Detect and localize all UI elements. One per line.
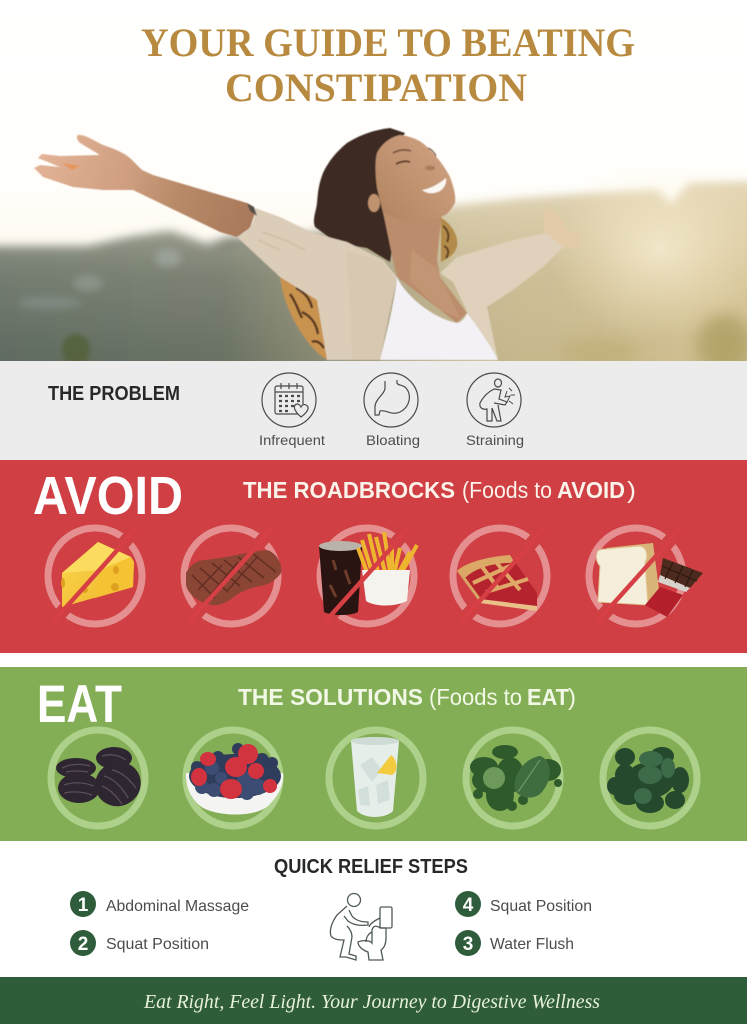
cardigan, right sleeve: [440, 233, 563, 360]
step 4: 4: [463, 895, 474, 916]
white top: [380, 277, 498, 360]
step 2: Squat Position: [106, 936, 209, 953]
step 4: [455, 891, 592, 917]
step 3: [455, 930, 574, 956]
step 1: 1: [78, 895, 89, 916]
right hand: [544, 210, 578, 248]
food: bread and chocolate, crossed out: [589, 527, 703, 624]
step 4: Squat Position: [490, 898, 592, 915]
hair, dark mass: [314, 128, 405, 262]
food: steak, crossed out: [184, 527, 281, 624]
brows, eyes, nose shadow: [393, 150, 411, 153]
heading: the solutions: EAT: [527, 684, 569, 710]
heading: the roadbrocks: THE ROADBROCKS: [243, 477, 455, 503]
icon: person on toilet: [330, 894, 392, 960]
food: cola and fries, crossed out: [319, 527, 417, 624]
hills background: [0, 176, 747, 361]
ear: [368, 194, 380, 212]
step 1: [70, 891, 249, 917]
panel: quick relief steps: [0, 841, 747, 977]
cardigan, left sleeve and front: [237, 208, 397, 360]
heading: quick relief steps: QUICK RELIEF STEPS: [274, 856, 468, 878]
food: bowl of berries: [186, 730, 283, 826]
golden curls, lower left: [280, 277, 328, 360]
title: YOUR GUIDE TO BEATING: [141, 20, 635, 65]
icon: stomach: [364, 373, 418, 427]
heading: the solutions: (Foods to: [429, 684, 522, 710]
hero photo: woman with open arms at sunrise: [0, 127, 747, 361]
title: CONSTIPATION: [225, 65, 527, 110]
heading: the solutions: THE SOLUTIONS: [238, 684, 423, 710]
heading: the solutions: ): [568, 684, 576, 710]
food: cheese, crossed out: [48, 527, 142, 624]
face: [376, 135, 455, 222]
label: straining: Straining: [466, 432, 524, 448]
panel: avoid: [0, 460, 747, 653]
neck and chest skin: [383, 212, 467, 323]
heading: eat: EAT: [37, 675, 122, 734]
footer banner: Eat Right, Feel Light. Your Journey to Digestive Wellness: [143, 991, 600, 1013]
title: [141, 20, 635, 110]
heading: avoid: AVOID: [33, 466, 183, 526]
heading: the roadbrocks: AVOID: [557, 477, 625, 503]
heading: the solutions: [238, 684, 576, 710]
step 3: 3: [463, 934, 473, 955]
icon: calendar with heart: [262, 373, 316, 427]
panel: the problem: [0, 361, 747, 461]
food: glass of water with lemon: [329, 730, 423, 826]
step 1: Abdominal Massage: [106, 898, 249, 915]
step 2: [70, 930, 209, 956]
heading: the problem: THE PROBLEM: [48, 383, 180, 405]
left arm and hand: [34, 135, 255, 237]
heading: the roadbrocks: (Foods to: [462, 477, 552, 503]
right curls: [441, 218, 457, 262]
smile: [422, 178, 446, 193]
heading: the roadbrocks: [243, 477, 636, 503]
woman figure: [34, 128, 582, 360]
sleeve cuff: [247, 203, 257, 216]
label: infrequent: Infrequent: [259, 432, 325, 448]
footer banner: [0, 977, 747, 1024]
icon: straining person: [467, 373, 521, 427]
heading: the roadbrocks: ): [627, 477, 636, 503]
panel: eat: [0, 667, 747, 841]
food: spinach: [603, 730, 697, 826]
food: prunes: [51, 730, 149, 826]
step 2: 2: [78, 934, 88, 955]
step 3: Water Flush: [490, 936, 574, 953]
food: leafy greens: [466, 730, 562, 826]
label: bloating: Bloating: [366, 432, 420, 448]
food: cherry pie, crossed out: [453, 527, 547, 624]
